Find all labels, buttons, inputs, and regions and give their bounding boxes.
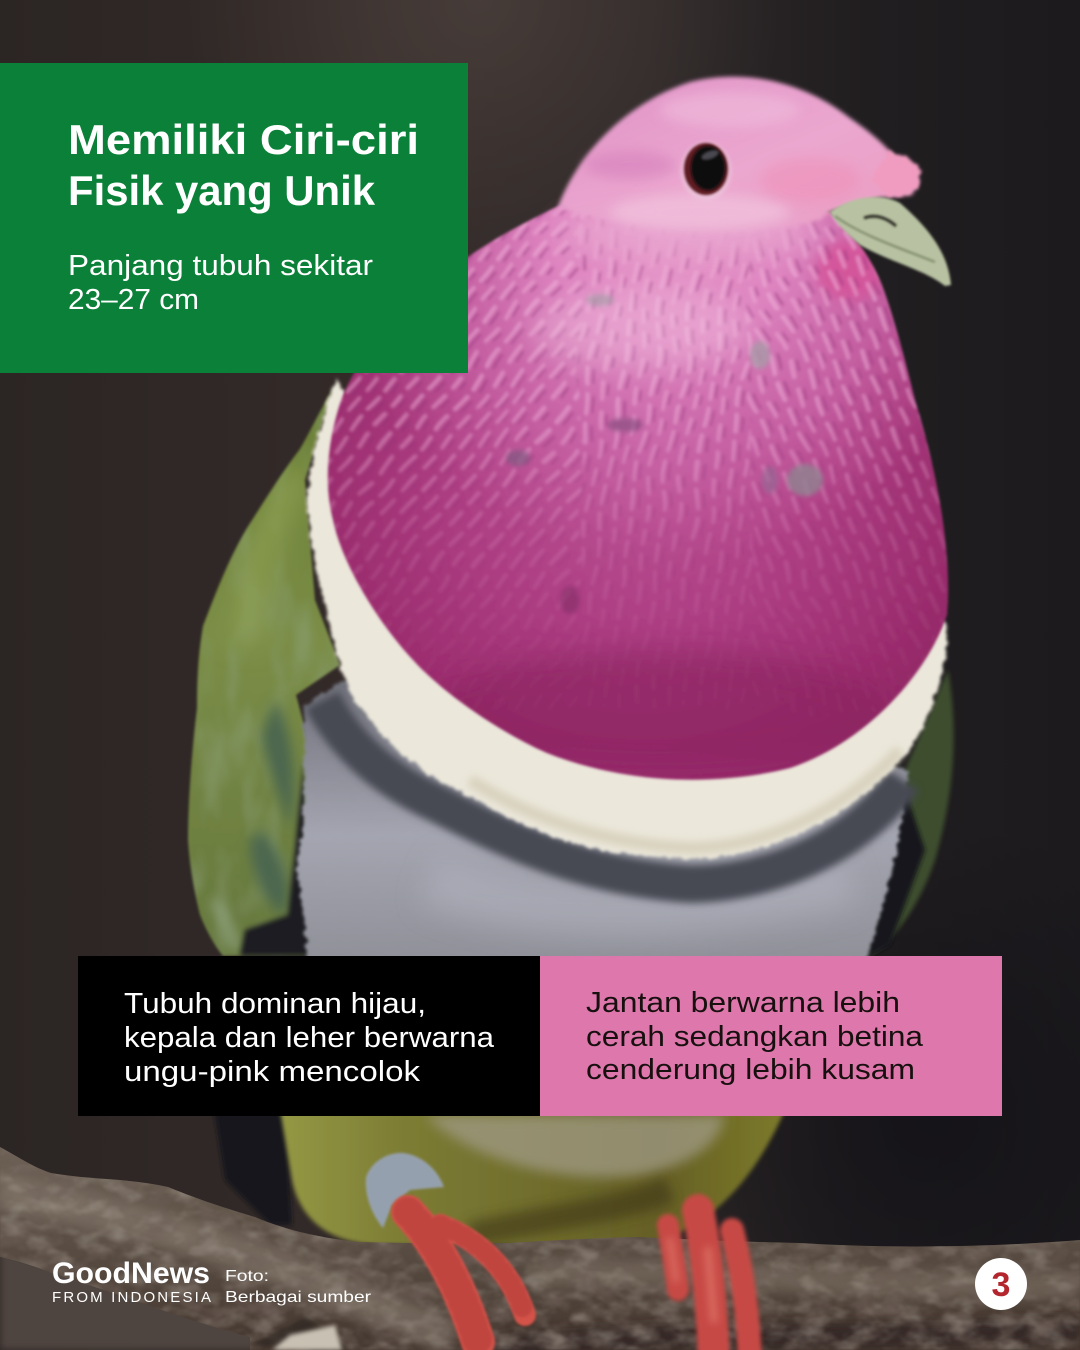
white collar [307,378,948,858]
toe highlights [670,1240,714,1320]
panel: black caption [78,956,540,1116]
heading [68,116,419,214]
panel: pink caption: Jantan berwarna lebih [586,987,900,1019]
panel: black caption: ungu-pink mencolok [124,1056,421,1088]
head [558,77,921,254]
panel: title [0,63,468,373]
branch [0,1140,1080,1350]
panel: pink caption [540,956,1002,1116]
logo: GoodNews: FROM INDONESIA [52,1289,211,1306]
subheading: Panjang tubuh sekitar [68,250,373,282]
panel: pink caption: cerah sedangkan betina [586,1021,924,1053]
photo credit: Foto: [225,1268,269,1285]
darker lower breast [450,646,864,766]
logo: GoodNews: GoodNews [52,1257,210,1290]
background under branch [0,1250,260,1350]
forehead blush [760,158,860,202]
photo credit [225,1268,372,1306]
throat shadow [816,240,884,300]
left wing [186,392,340,956]
left foot [408,1212,525,1342]
face highlight [610,194,790,230]
bark texture [0,1140,1080,1350]
logo: GoodNews [52,1257,211,1306]
subheading: 23–27 cm [68,284,199,316]
subheading [68,250,373,316]
grey belly [296,680,908,962]
panel: black caption: kepala dan leher berwarna [124,1022,495,1054]
right foot [668,1210,750,1350]
photo credit: Berbagai sumber [225,1289,372,1306]
crown highlight [660,92,800,128]
feather texture [327,208,947,636]
dark band under collar [322,700,903,884]
branch shadow fork [250,1317,350,1350]
heading: Fisik yang Unik [68,167,376,214]
feather gaps [506,294,823,614]
magenta breast [326,204,950,782]
leg ring [366,1153,444,1228]
dark under-wing [240,760,312,956]
brow shadow [585,151,675,179]
head to neck blend [560,210,820,254]
right wing [866,670,954,958]
lower body [280,1110,785,1245]
page number badge [975,1258,1027,1310]
beak [830,197,951,286]
eye [681,142,731,200]
toe scutes [408,1212,525,1342]
crest tuft [870,152,921,198]
panel: pink caption: cenderung lebih kusam [586,1054,915,1086]
heading: Memiliki Ciri-ciri [68,116,419,163]
page number badge: 3 [992,1266,1010,1304]
pale tufts [530,290,750,370]
panel: black caption: Tubuh dominan hijau, [124,988,426,1020]
tail feathers [214,1110,292,1225]
neck colour [397,204,918,514]
